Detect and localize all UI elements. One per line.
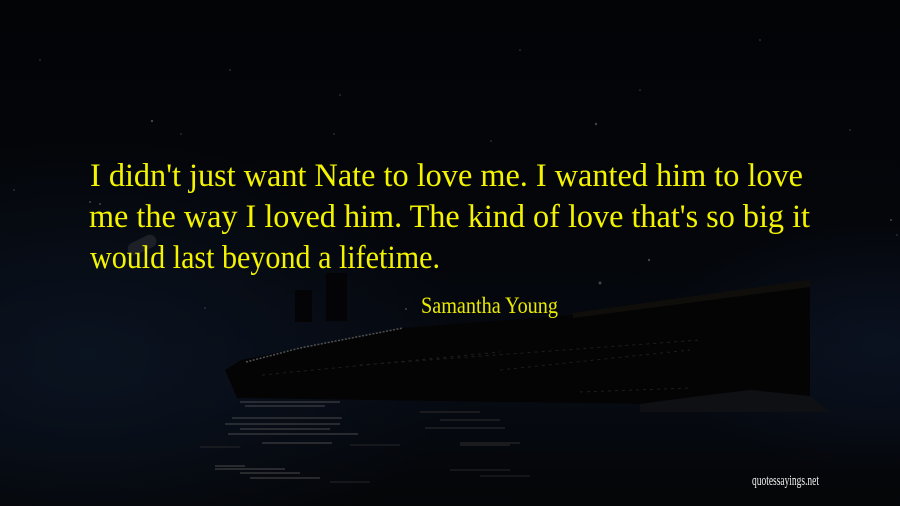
- quote line 2: me the way I loved him. The kind of love that's so big it: [89, 199, 810, 235]
- author: Samantha Young: [421, 293, 558, 318]
- water reflections: [200, 402, 530, 482]
- watermark: quotessayings.net: [752, 473, 820, 489]
- ship silhouette: [225, 273, 830, 412]
- quote line 3: would last beyond a lifetime.: [90, 240, 440, 276]
- quote text: [89, 158, 810, 276]
- quote line 1: I didn't just want Nate to love me. I wanted him to love: [90, 158, 803, 194]
